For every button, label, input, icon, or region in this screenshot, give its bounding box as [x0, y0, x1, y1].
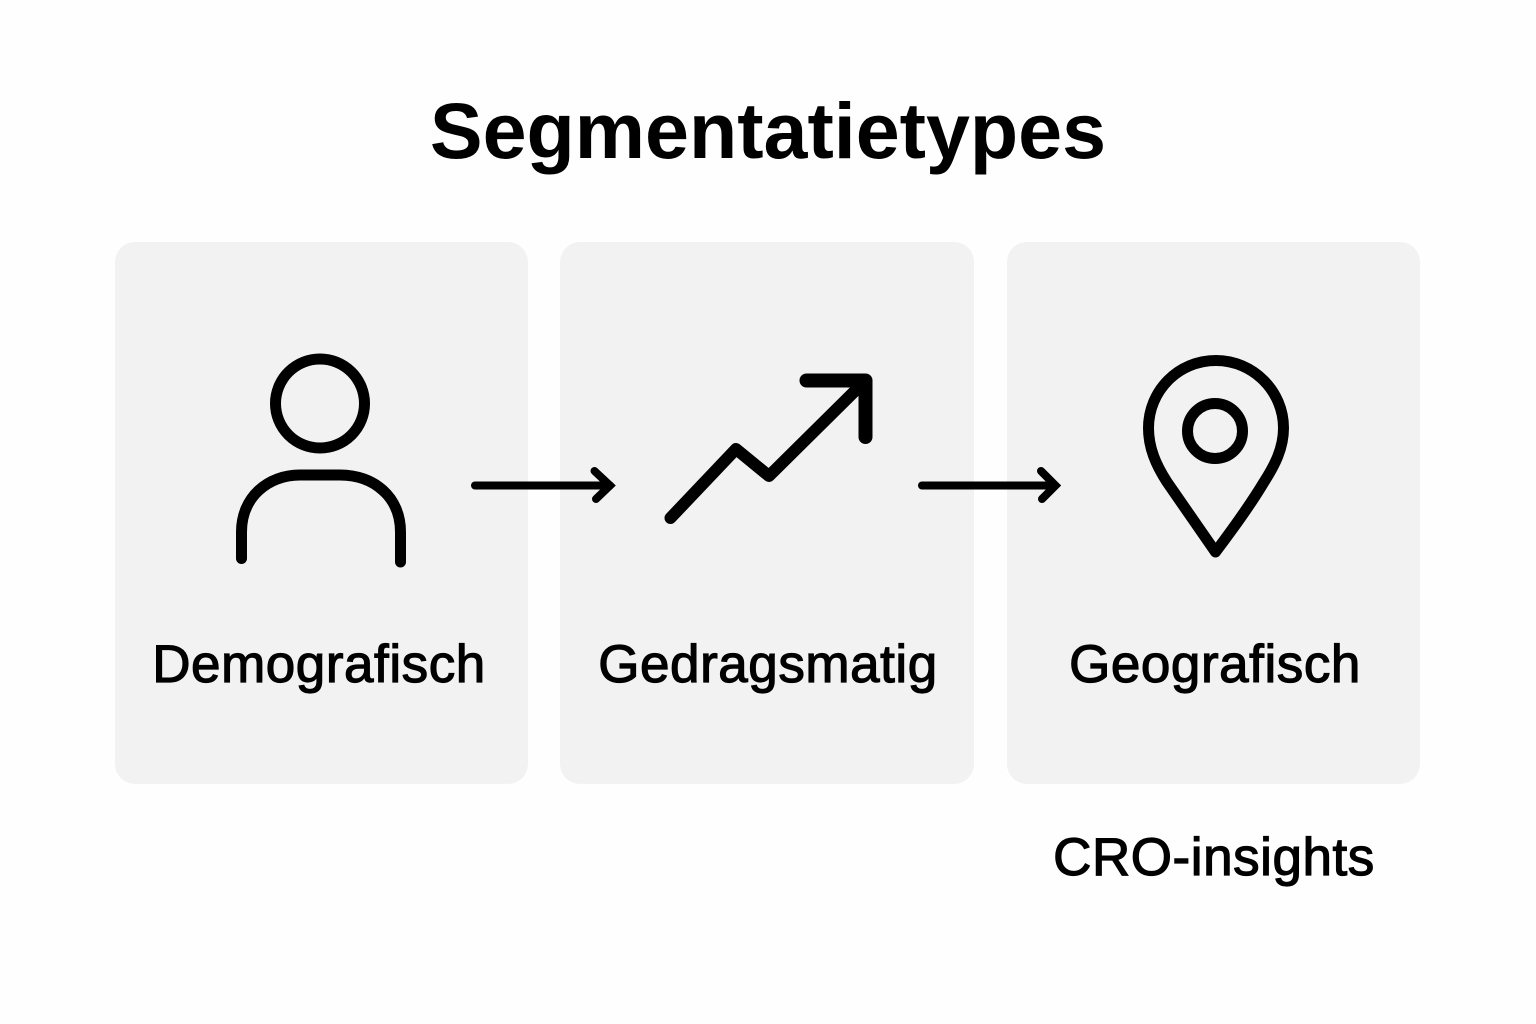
panel: geografisch — [1007, 242, 1420, 784]
arrow: gedragsmatig to geografisch — [918, 467, 1062, 503]
label: gedragsmatig: Gedragsmatig — [598, 635, 938, 694]
label: geografisch: Geografisch — [1069, 635, 1361, 694]
panel: demografisch — [115, 242, 528, 784]
panel: gedragsmatig — [560, 242, 974, 784]
icon: person — [236, 354, 406, 568]
icon: growth arrow — [664, 374, 872, 524]
label: demografisch: Demografisch — [152, 635, 486, 694]
title: Segmentatietypes — [430, 86, 1106, 175]
arrow: demografisch to gedragsmatig — [471, 467, 616, 503]
source note: CRO-insights — [1053, 828, 1375, 887]
icon: map pin — [1143, 355, 1289, 558]
